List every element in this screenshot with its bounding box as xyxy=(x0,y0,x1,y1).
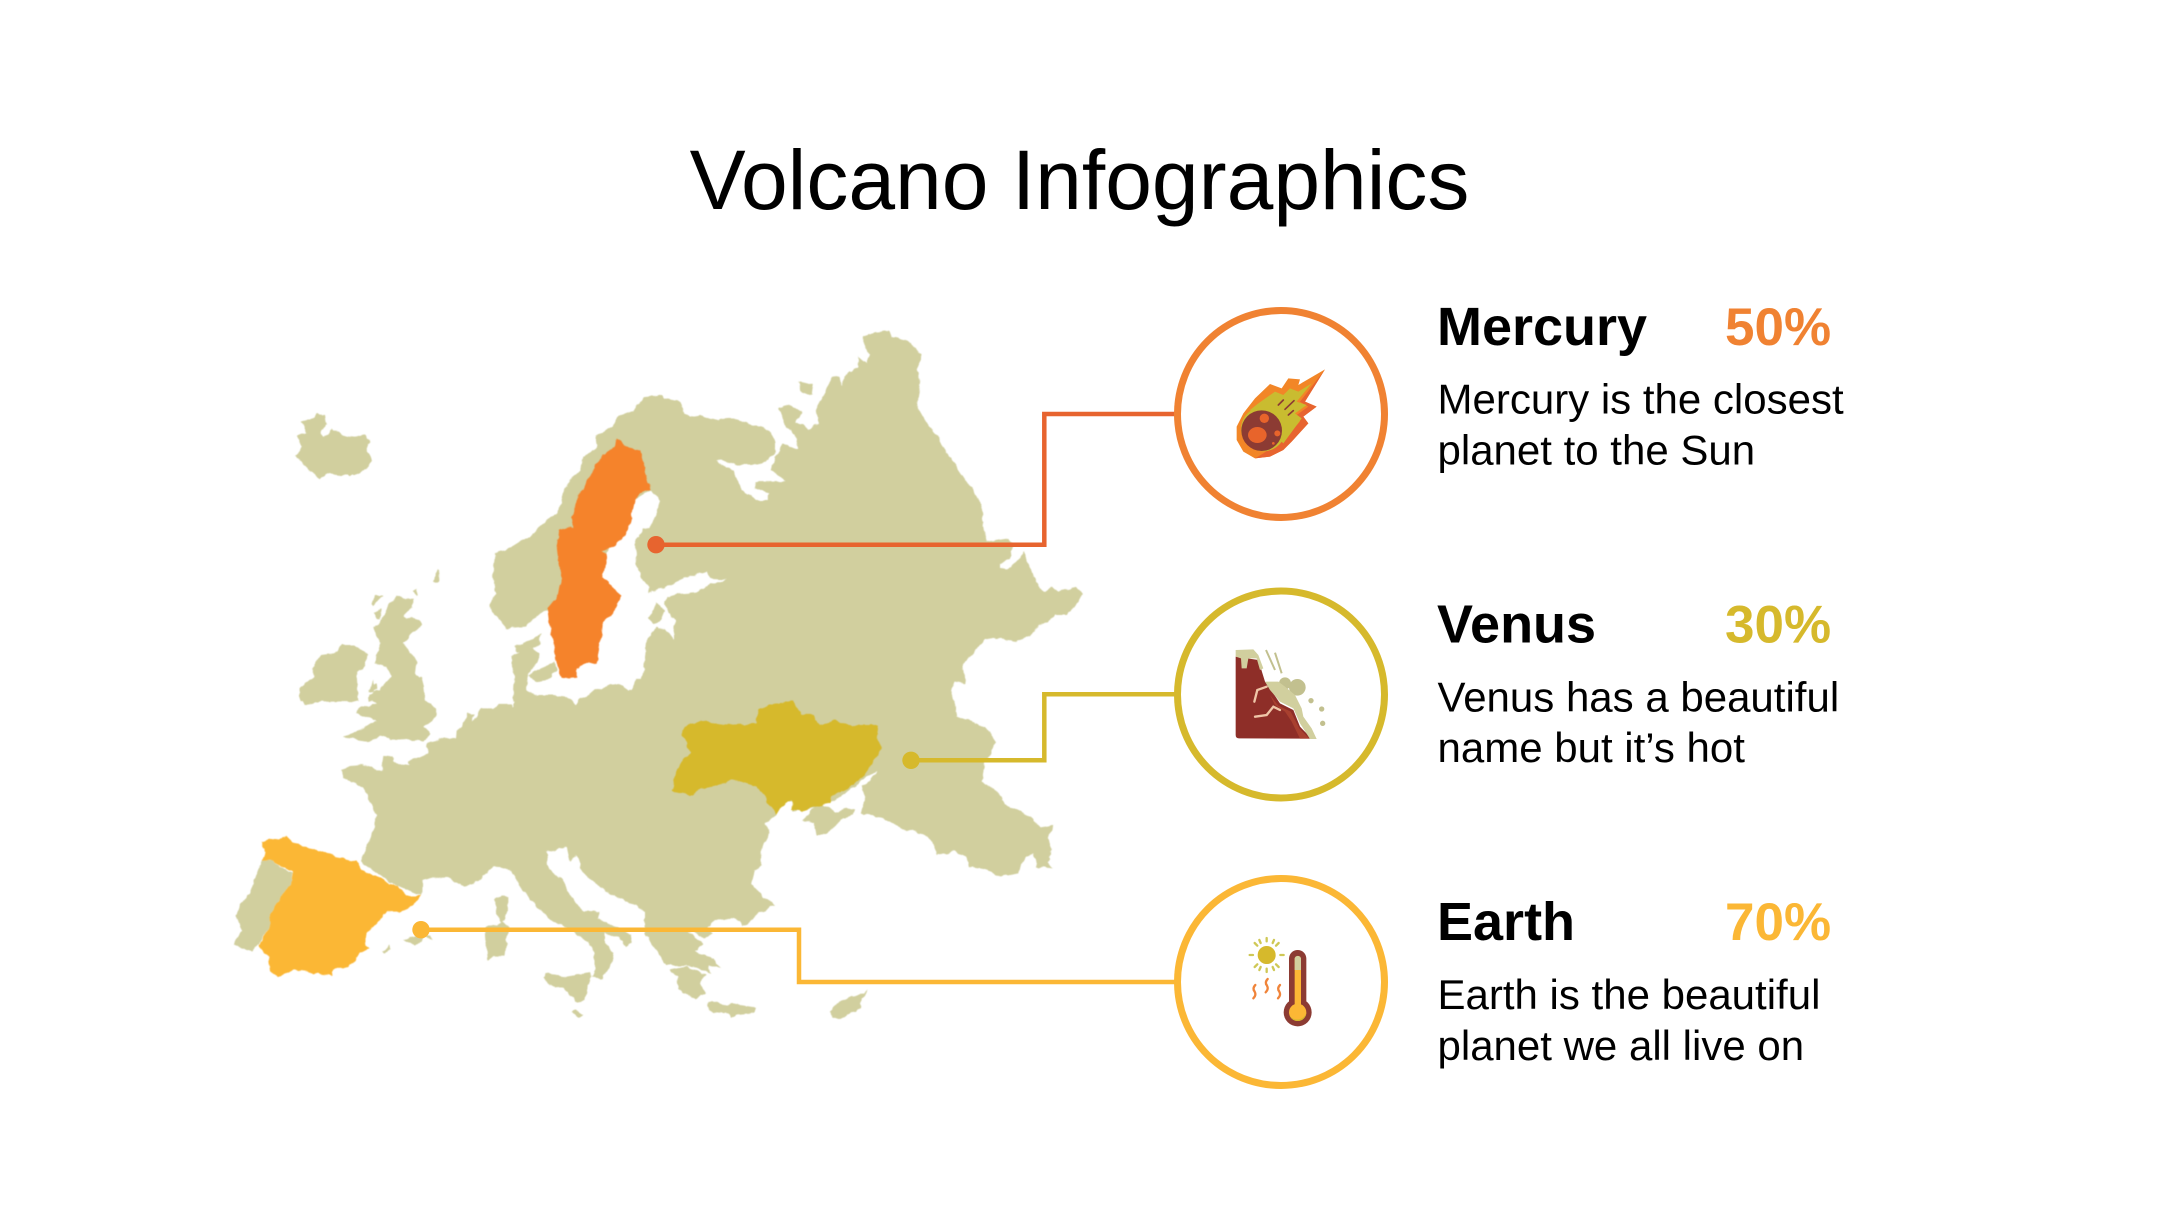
map: western Europe land xyxy=(233,678,652,1017)
description: Mercury: planet to the Sun xyxy=(1438,426,1755,474)
icon: sun and thermometer xyxy=(1250,938,1312,1026)
description: Venus: name but it’s hot xyxy=(1438,724,1745,771)
circle: Earth xyxy=(1178,878,1384,1086)
circle: Mercury xyxy=(1178,310,1384,518)
connector: Mercury xyxy=(647,414,1178,553)
map: northern Europe land xyxy=(295,396,703,702)
description: Earth: planet we all live on xyxy=(1438,1022,1804,1069)
description: Mercury: Mercury is the closest xyxy=(1438,376,1844,422)
title: Volcano Infographics xyxy=(690,133,1469,227)
icon: rockslide xyxy=(1236,649,1325,739)
connector: Venus xyxy=(902,694,1178,769)
connector: Earth xyxy=(412,921,1178,982)
map: highlighted Ukraine xyxy=(672,701,882,815)
heading: Venus: Venus xyxy=(1437,594,1596,654)
heading: Mercury: Mercury xyxy=(1437,297,1647,357)
description: Venus: Venus has a beautiful xyxy=(1438,674,1839,720)
icon: meteor xyxy=(1237,369,1325,458)
map of Europe xyxy=(233,331,1082,1018)
heading: Earth: Earth xyxy=(1437,892,1575,952)
map: highlighted Sweden xyxy=(547,437,651,678)
row: Mercury xyxy=(1178,297,1844,518)
value: 50%: 50% xyxy=(1725,298,1831,357)
value: 30%: 30% xyxy=(1725,596,1831,654)
map: Russia and Finland land xyxy=(648,331,1082,702)
description: Earth: Earth is the beautiful xyxy=(1438,971,1820,1018)
map: eastern Europe land xyxy=(648,678,1054,1018)
circle: Venus xyxy=(1178,591,1384,798)
map: highlighted Spain xyxy=(258,836,422,977)
value: 70%: 70% xyxy=(1725,893,1831,952)
row: Earth xyxy=(1178,878,1831,1086)
row: Venus xyxy=(1178,591,1839,798)
